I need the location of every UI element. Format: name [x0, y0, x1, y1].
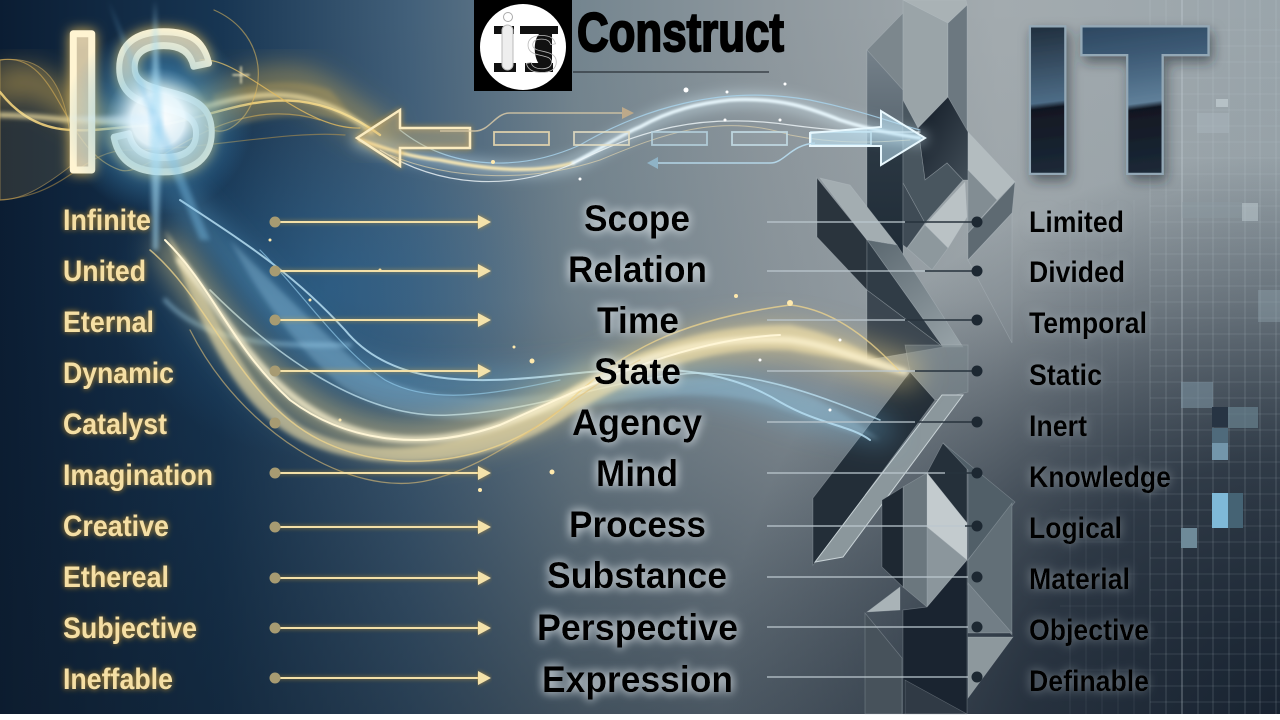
- right column: IT qualities: Material: [1029, 563, 1130, 596]
- left column: IS qualities: Creative: [63, 510, 169, 543]
- title: Construct: Construct: [577, 1, 784, 63]
- logo: [474, 0, 572, 91]
- heading: IT: [1019, 0, 1208, 215]
- right column: IT qualities: Divided: [1029, 256, 1125, 289]
- middle column: dimensions: Mind: [596, 453, 678, 494]
- background grid: [1060, 0, 1280, 714]
- left column: IS qualities: Subjective: [63, 612, 197, 645]
- middle column: dimensions: Relation: [568, 249, 707, 290]
- energy waves: [0, 10, 920, 492]
- middle column: dimensions: Agency: [572, 402, 702, 443]
- right arrowhead: [810, 111, 925, 165]
- logo: S: [524, 26, 559, 84]
- heading: IS: [55, 0, 220, 213]
- left column: IS qualities: Dynamic: [63, 357, 174, 390]
- left column: IS qualities: Imagination: [63, 459, 213, 492]
- left connector arrows: [270, 215, 491, 685]
- lower prism column: [865, 443, 1015, 714]
- dashes: [494, 132, 871, 145]
- right column: IT qualities: Knowledge: [1029, 461, 1171, 494]
- left column: IS qualities: United: [63, 255, 146, 288]
- left column: IS qualities: [63, 204, 213, 696]
- left column: IS qualities: Catalyst: [63, 408, 167, 441]
- right column: IT qualities: Definable: [1029, 665, 1149, 698]
- middle column: dimensions: State: [594, 351, 681, 392]
- prism sculpture: [813, 0, 1015, 714]
- wave: upper connecting ribbon: [360, 95, 920, 182]
- right column: IT qualities: Logical: [1029, 512, 1122, 545]
- middle column: dimensions: Substance: [547, 555, 727, 596]
- diagonal glass bar: [817, 178, 963, 360]
- left column: IS qualities: Ineffable: [63, 663, 173, 696]
- left column: IS qualities: Ethereal: [63, 561, 169, 594]
- right column: IT qualities: Limited: [1029, 206, 1124, 239]
- left arrowhead: [357, 110, 470, 166]
- right column: IT qualities: [1029, 206, 1171, 698]
- wave: lower blue ribbon: [165, 200, 880, 440]
- middle column: dimensions: Time: [597, 300, 679, 341]
- right column: IT qualities: Temporal: [1029, 307, 1147, 340]
- sparkles: [268, 82, 842, 492]
- small lower arrow: [647, 143, 815, 169]
- left column: IS qualities: Eternal: [63, 306, 154, 339]
- right column: IT qualities: Inert: [1029, 410, 1087, 443]
- middle column: dimensions: Perspective: [537, 607, 738, 648]
- middle column: dimensions: Scope: [584, 198, 690, 239]
- central double arrow: [357, 107, 925, 169]
- small upper arrow: [440, 107, 634, 131]
- right connector lines: [767, 216, 982, 682]
- upper prism column: [867, 0, 1015, 343]
- crossing lower bars: [813, 345, 968, 565]
- left column: IS qualities: Infinite: [63, 204, 151, 237]
- light flare: [60, 0, 253, 250]
- middle column: dimensions: [537, 198, 738, 700]
- wave: top left gold ribbon: [0, 10, 380, 200]
- right column: IT qualities: Objective: [1029, 614, 1149, 647]
- right column: IT qualities: Static: [1029, 359, 1102, 392]
- middle column: dimensions: Expression: [542, 659, 733, 700]
- wave: lower gold ribbon: [150, 230, 905, 483]
- middle column: dimensions: Process: [569, 504, 706, 545]
